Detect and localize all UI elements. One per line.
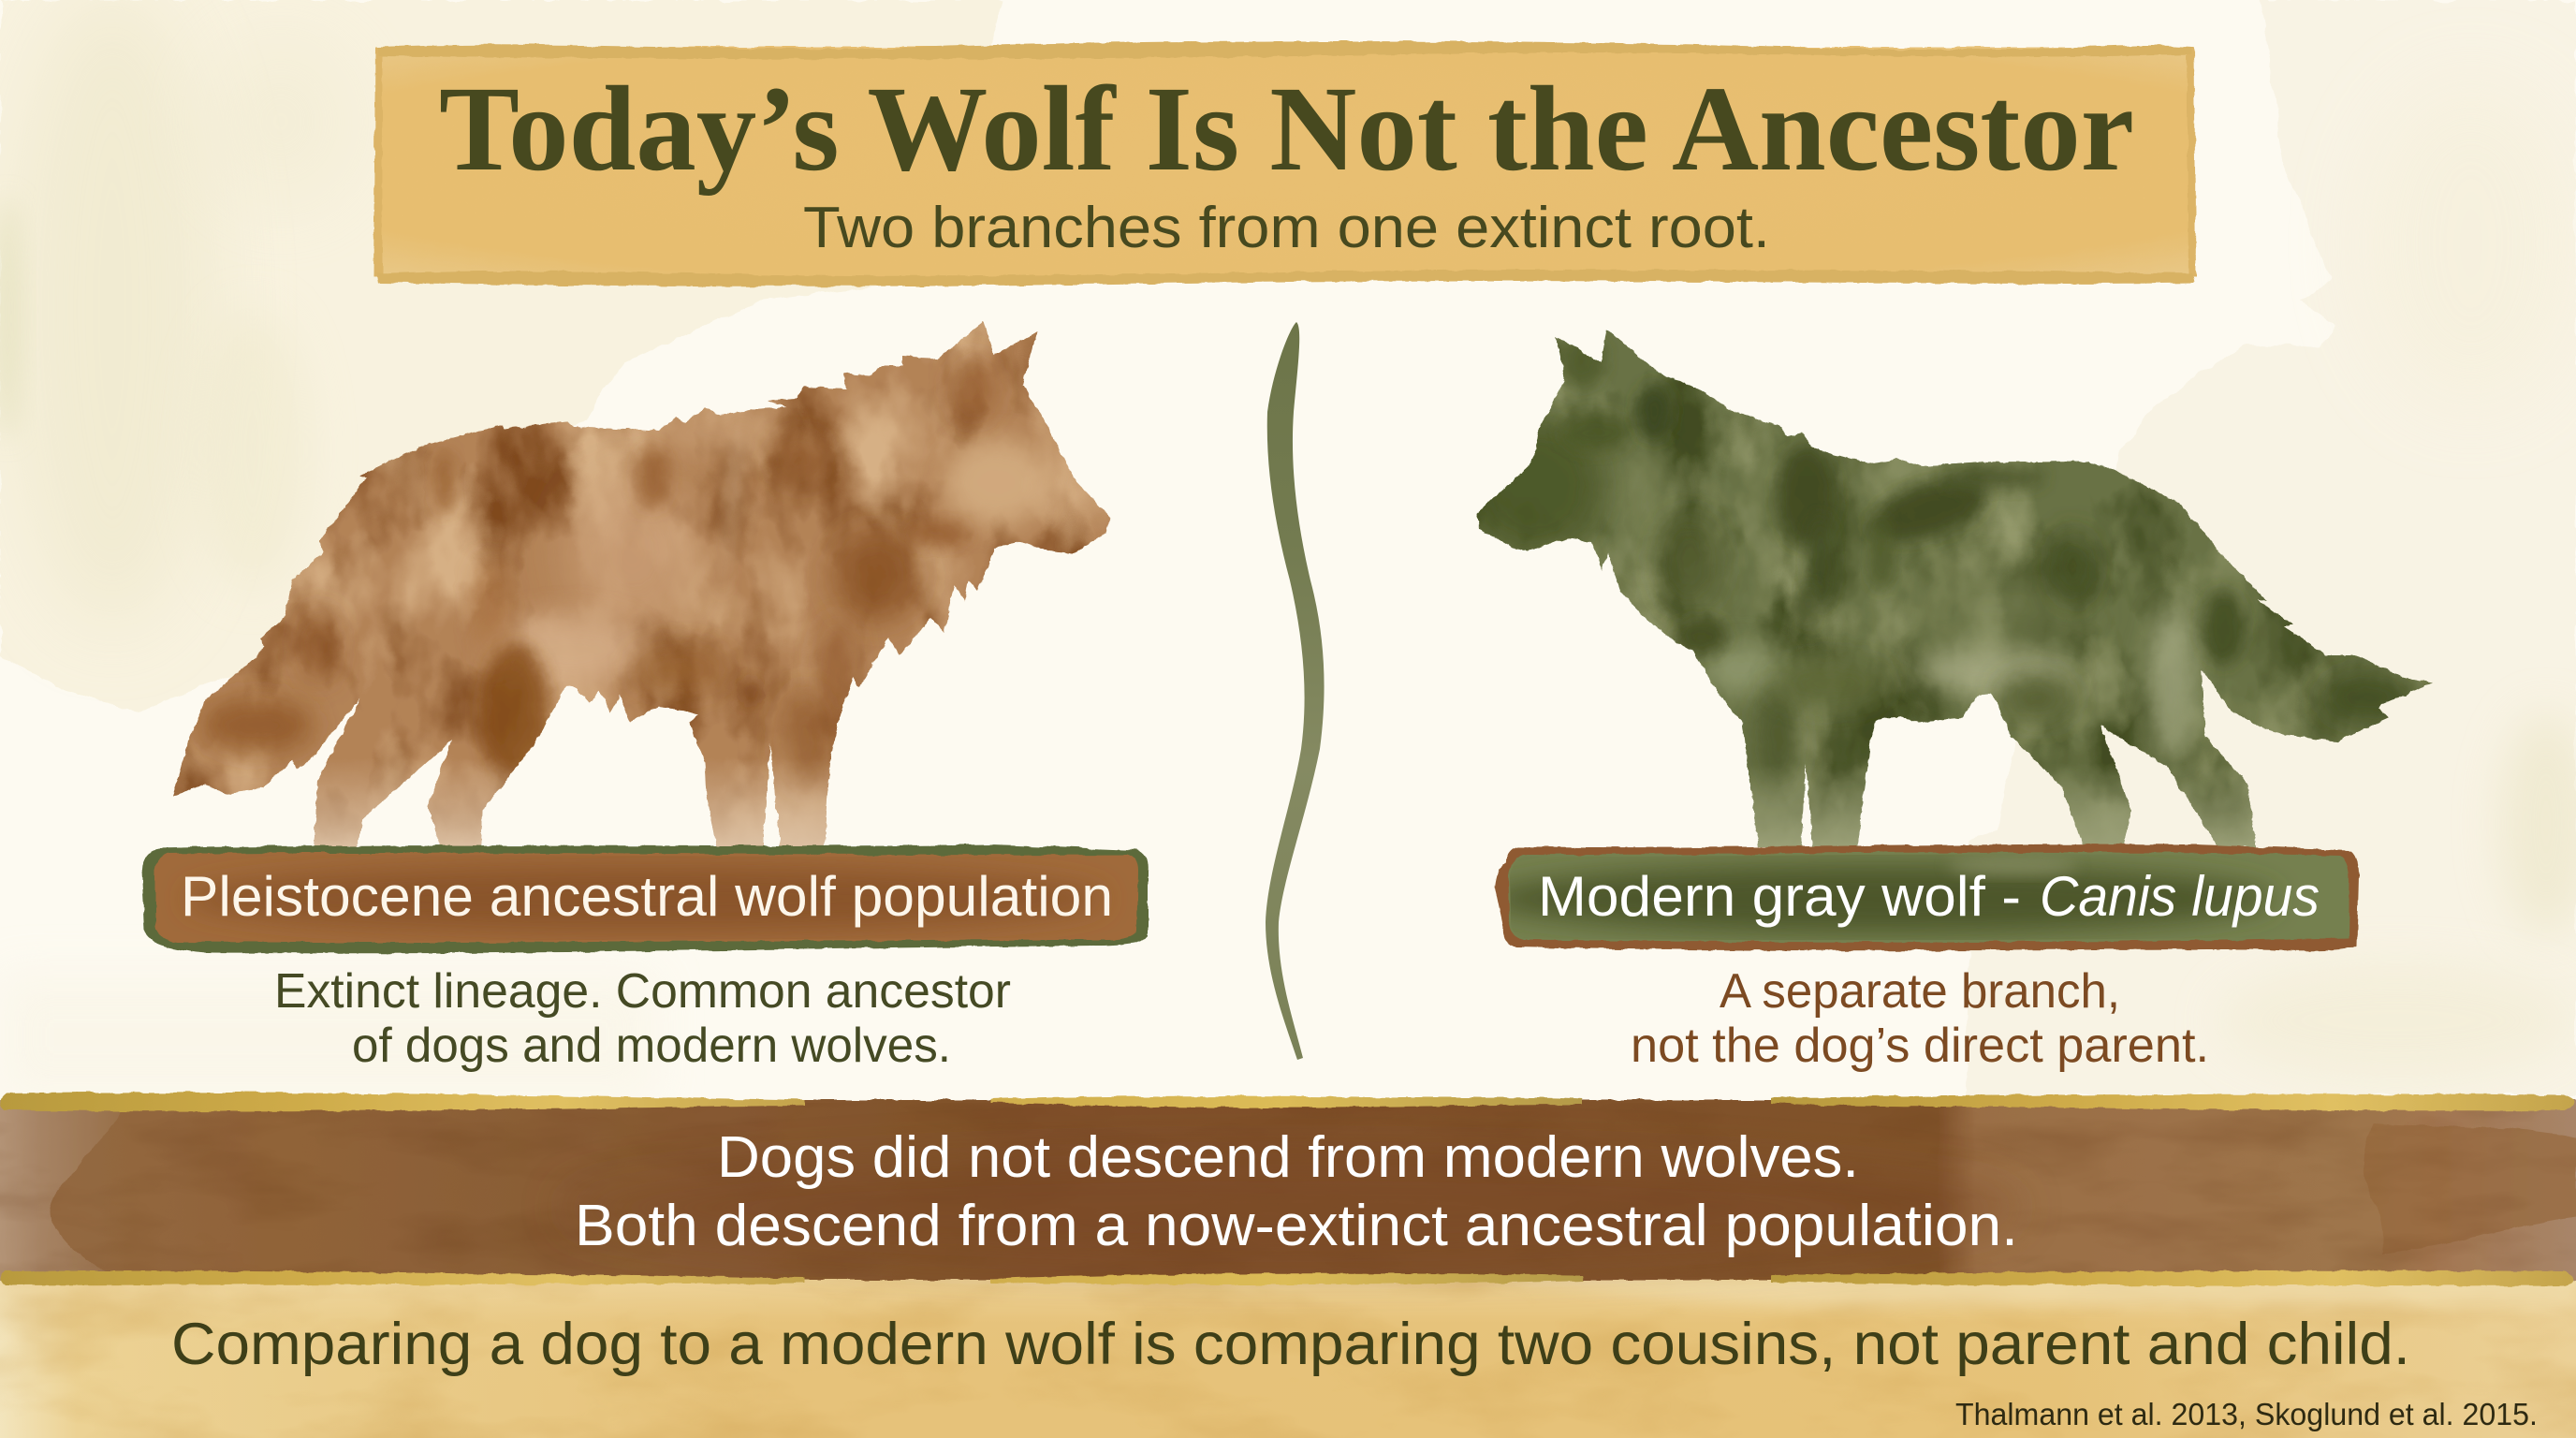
- divider: wavy vertical branch line: [1266, 322, 1325, 1060]
- title text: Today’s Wolf Is Not the Ancestor: [439, 62, 2134, 197]
- label plate: [141, 844, 1148, 953]
- title banner: [373, 41, 2196, 286]
- illustration: Modern gray wolf (olive watercolor silhouette): [1460, 318, 2452, 852]
- description: ancestral wolf: Extinct lineage. Common ancestor: [274, 964, 1011, 1019]
- subtitle text: Two branches from one extinct root.: [803, 196, 1770, 260]
- band text line 1: Dogs did not descend from modern wolves.: [717, 1125, 1859, 1190]
- brown conclusion band: [0, 1093, 2576, 1286]
- description: modern wolf: [1631, 964, 2209, 1073]
- description: modern wolf: not the dog’s direct parent.: [1631, 1019, 2209, 1073]
- label: Modern gray wolf - Canis lupus: [1488, 844, 2359, 950]
- banner panel: [373, 41, 2196, 286]
- citation: Thalmann et al. 2013, Skoglund et al. 2015.: [1955, 1397, 2538, 1431]
- band wash: [0, 1100, 2576, 1280]
- illustration: Pleistocene ancestral wolf (brown watercolor silhouette): [140, 309, 1133, 852]
- description: ancestral wolf: of dogs and modern wolves.: [352, 1019, 951, 1073]
- band text line 2: Both descend from a now-extinct ancestral population.: [575, 1194, 2018, 1258]
- footer takeaway text: Comparing a dog to a modern wolf is comparing two cousins, not parent and child.: [171, 1312, 2410, 1377]
- gold strips: [0, 1093, 2574, 1286]
- label text roman: Modern gray wolf -: [1538, 865, 2021, 928]
- label: Pleistocene ancestral wolf population: [141, 844, 1148, 953]
- description: modern wolf: A separate branch,: [1720, 964, 2120, 1019]
- footer gold panel: [0, 1273, 2576, 1438]
- label plate: [1495, 844, 2359, 950]
- description: ancestral wolf: [274, 964, 1011, 1073]
- label text italic species name: Canis lupus: [2040, 865, 2320, 928]
- label text: Pleistocene ancestral wolf population: [181, 865, 1113, 928]
